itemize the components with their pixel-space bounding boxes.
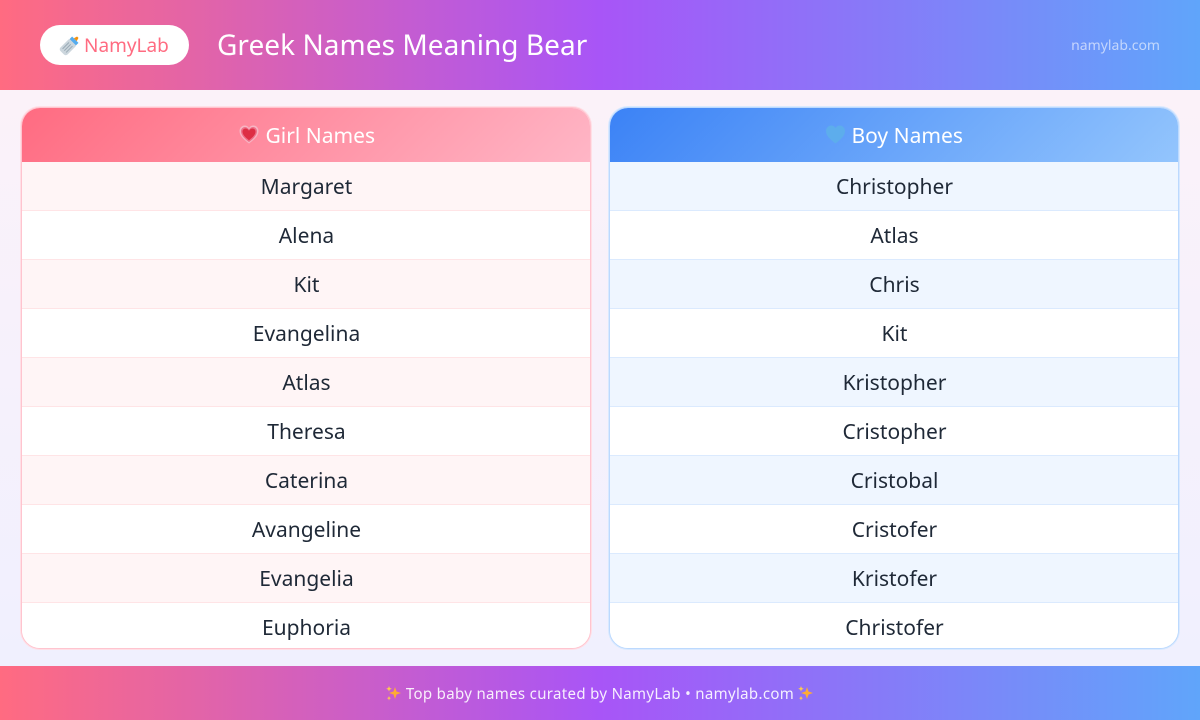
boy name rows [610,162,1178,648]
girl name rows: Alena [279,222,334,250]
boy name rows: Christofer [845,614,944,642]
girl name rows: Evangelina [253,320,360,348]
girl name rows [22,162,590,648]
girl name rows: Margaret [261,173,352,201]
girl name rows: Evangelia [259,565,354,593]
girl name rows: Caterina [265,467,348,495]
boy name rows: Kristofer [852,565,937,593]
icon: baby bottle [60,36,78,56]
title: Greek Names Meaning Bear [217,26,587,64]
footer bar [0,666,1200,720]
panel: boy names [609,107,1179,649]
site url: namylab.com [1071,36,1160,55]
boy name rows: Cristopher [842,418,947,446]
boy name rows: Chris [869,271,920,299]
footer text: Top baby names curated by NamyLab • namylab.com [406,684,794,704]
girl name rows: Atlas [282,369,331,397]
heading text: Girl Names [266,122,375,150]
boy name rows: Kit [882,320,908,348]
icon: pink heart [240,126,258,144]
heading text: Boy Names [852,122,963,150]
header bar [0,0,1200,90]
boy name rows: Kristopher [843,369,946,397]
girl name rows: Kit [294,271,320,299]
girl name rows: Theresa [267,418,346,446]
logo text: NamyLab [84,32,169,58]
girl name rows: Euphoria [262,614,351,642]
panel: girl names [21,107,591,649]
boy name rows: Christopher [836,173,953,201]
girl name rows: Avangeline [252,516,361,544]
icon: blue heart [826,126,845,144]
panel heading: girl names [22,108,590,162]
boy name rows: Atlas [870,222,919,250]
logo pill [40,25,189,65]
boy name rows: Cristobal [851,467,938,495]
panel heading: boy names [610,108,1178,162]
boy name rows: Cristofer [852,516,937,544]
